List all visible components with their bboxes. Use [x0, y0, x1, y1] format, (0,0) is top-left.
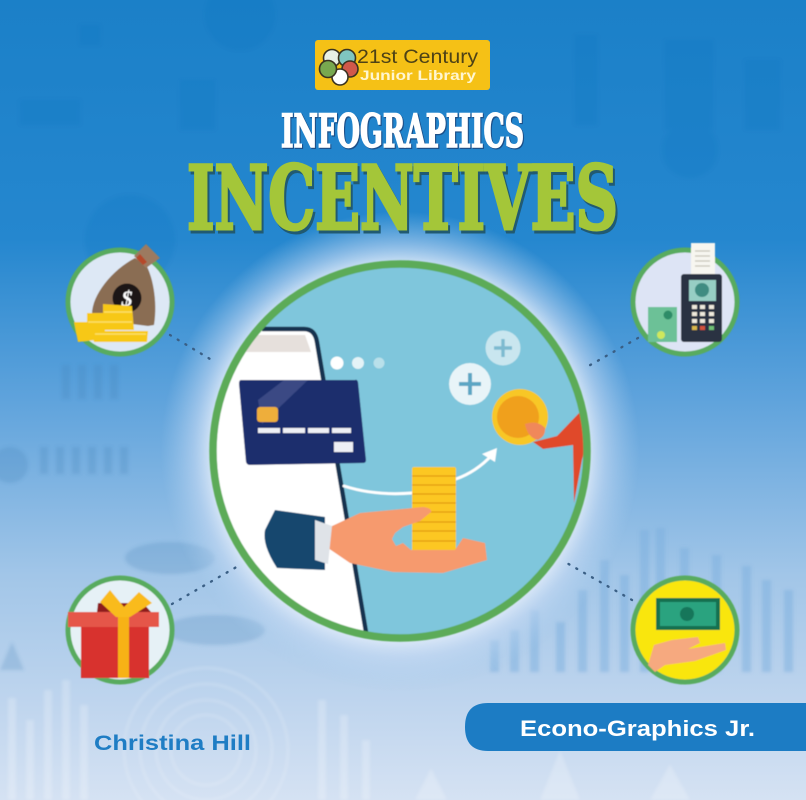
- logo text: 21st Century: [357, 46, 478, 68]
- logo flower: [320, 50, 358, 85]
- coin stack: [412, 467, 456, 552]
- heading: infographics: INFOGRAPHICS: [282, 105, 525, 159]
- icon: payment terminal: [633, 243, 737, 354]
- central illustration circle: [205, 264, 592, 638]
- sleeve: [264, 510, 325, 570]
- credit card: [239, 380, 366, 465]
- hand holding coins: [264, 507, 487, 573]
- icon: money bag: $: [120, 286, 132, 311]
- phone outline: [262, 329, 366, 632]
- icon: gift box: [68, 578, 172, 682]
- heading: infographics: INFOGRAPHICS: [281, 104, 524, 158]
- dotted connector lines: [170, 335, 638, 604]
- dots: [330, 356, 384, 370]
- plus bubbles: [449, 330, 520, 405]
- series banner: [465, 703, 806, 751]
- red sleeve hand: [532, 412, 584, 502]
- heading: incentives: INCENTIVES: [189, 149, 620, 253]
- heading: infographics: [281, 104, 525, 159]
- logo badge: Junior Library: [360, 67, 476, 83]
- logo badge: [315, 40, 490, 90]
- cuff: [315, 520, 332, 564]
- heading: incentives: INCENTIVES: [187, 146, 618, 250]
- icon: money bag: [68, 244, 172, 354]
- growth arrow: [344, 448, 497, 494]
- green ring: [213, 264, 587, 638]
- central glow: [160, 211, 640, 691]
- icon: hand with banknote: [633, 578, 737, 682]
- phone screen: [205, 328, 366, 632]
- author name: Christina Hill: [94, 732, 251, 755]
- gold coin: [492, 389, 548, 445]
- series banner: Econo-Graphics Jr.: [520, 716, 755, 741]
